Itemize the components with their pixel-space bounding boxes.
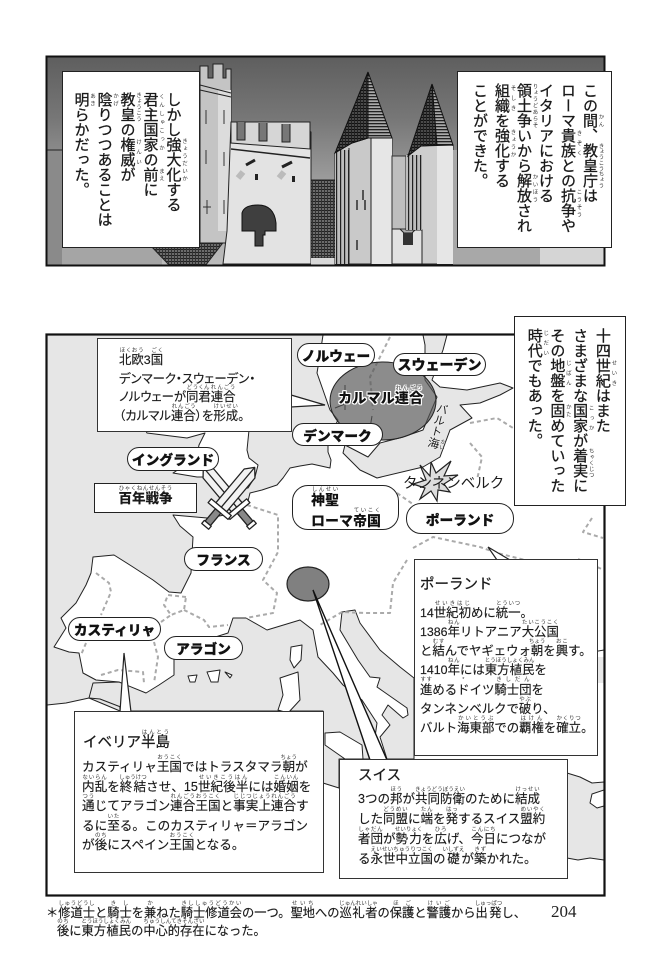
arrow: callout pointer to Switzerland (313, 590, 387, 760)
callout text: 北欧ほくおう 3国ごく (119, 348, 163, 367)
caption text: ことができた。 (471, 83, 488, 188)
Baltic Sea (343, 335, 513, 478)
callout body: と結むす んでヤギェウォ朝ちょう を興おこ す。 (420, 639, 592, 658)
caption text: イタリアにおける (537, 83, 554, 203)
tower: left square tower (200, 64, 231, 243)
caption text (72, 92, 188, 227)
callout heading: イベリア半島はんとう (83, 730, 170, 751)
Adriatic and Ionian Sea (340, 610, 414, 759)
footnote: ＊修道士しゅうどうし と騎士きし を兼か ねた騎士修道会きししゅうどうかい の一つ。聖地せいち への巡礼者じゅんれいしゃ の保護ほご と警護けいご から出発しゅっぱつ し、 (46, 901, 526, 920)
callout body: 進すす めるド* イツ騎士団きしだん を (420, 677, 544, 697)
label: Holy Roman Empire (292, 485, 399, 530)
caption: castle right (457, 71, 612, 248)
caption text: 君主国家くんしゅこっか の 前まえ に (142, 92, 164, 197)
callout text: ノルウェーが同君連合どうくんれんごう (119, 385, 236, 404)
map and castle artwork (45, 56, 606, 897)
label: Sweden: スウェーデン (398, 356, 482, 372)
caption text (526, 328, 617, 493)
callout heading: スイス (358, 768, 401, 784)
callout body: バルト海東部かいとうぶ での覇権はけん を確立かくりつ 。 (420, 716, 593, 735)
caption text: さまざまな 国家こっか が 着実ちゃくじつ に (571, 328, 594, 493)
label: England: イングランド (132, 453, 214, 468)
label: Norway (297, 343, 375, 367)
footnote (46, 900, 526, 938)
callout text (119, 347, 255, 423)
label: France (184, 547, 263, 571)
label: Hundred Years War: 百年戦争ひゃくねんせんそう (118, 486, 172, 506)
callout body: 者団しゃだん が勢力せいりょく を広ひろ げ、今日こんにち につなが (358, 827, 546, 846)
caption: fourteenth century (514, 316, 626, 506)
label: Tannenberg: タンネンベルク (403, 476, 504, 492)
label text (311, 486, 381, 528)
callout heading: ポーランド (420, 577, 492, 593)
label text: 神聖しんせい (311, 487, 339, 508)
callout: Poland (414, 559, 598, 756)
caption text: 領土争りょうどあらそ いから 解放かいほう され (515, 83, 538, 233)
ellipse: Kalmar Union territory (330, 362, 436, 440)
icon: crossed swords (193, 459, 265, 535)
label: Baltic Sea: バルト海かい (426, 402, 448, 451)
callout body: 通つう じてアラゴン連合王国れんごうおうこく と事実上連合じじつじょうれんごう す (82, 794, 309, 813)
panel: map of Europe (46, 335, 604, 895)
callout body: タンネンベルクで破やぶ り、 (420, 697, 556, 716)
callout text: （カルマル連合れんごう ）を形成けいせい 。 (119, 404, 244, 423)
label: Poland (406, 503, 514, 534)
label: Poland: ポーランド (426, 512, 494, 528)
tower: small pointed tower (406, 145, 453, 264)
caption text: その 地盤じばん を 固かた めていった (548, 328, 571, 493)
callout text: デンマーク・スウェーデン・ (119, 372, 255, 386)
ellipse: Switzerland (287, 567, 329, 601)
callout body: 14世紀初せいきはじ めに統一とういつ 。 (420, 601, 533, 620)
Atlantic and North Sea (46, 335, 338, 711)
callout: Iberian Peninsula (74, 711, 324, 873)
wall block (223, 122, 311, 264)
caption text: 教皇きょうこう の 権威けんい が (118, 92, 141, 182)
callout: Nordic union (97, 338, 292, 432)
callout body: カスティリャ王国おうこく ではトラスタマラ朝ちょう が (82, 755, 308, 774)
callout body: が後のち にスペイン王国おうこく となる。 (82, 833, 244, 852)
label: Castile: カスティリャ (74, 623, 155, 638)
border lines (81, 337, 604, 683)
label: Sweden (393, 353, 486, 376)
panel: castle illustration (46, 56, 604, 266)
caption text: 十四 世紀せいき はまた (594, 328, 616, 433)
label: France: フランス (196, 553, 251, 568)
caption text: この 間かん 、 教皇庁きょうこうちょう は (581, 83, 604, 203)
page number: 204 (551, 902, 576, 921)
callout body: る永世中立国えいせいちゅうりつこく の礎いしずえ が築きず かれた。 (358, 847, 536, 866)
callout body: 1410年ねん には東方植民とうほうしょくみん を (420, 658, 547, 677)
callout body (82, 754, 311, 852)
caption text: 陰かげ りつつあることは (96, 92, 118, 227)
icon: Tannenberg battle starburst (413, 461, 458, 501)
callout body: した同盟どうめい に端たん を発はっ するスイス盟約めいやく (358, 807, 545, 826)
label: Denmark (292, 423, 383, 446)
caption text: ローマ 貴族きぞく との 抗争こうそう や (559, 83, 582, 233)
callout: Switzerland (339, 759, 568, 879)
label: Castile (68, 617, 161, 641)
caption text: 時代じだい でもあった。 (526, 328, 548, 448)
Britain and Ireland (146, 432, 258, 489)
Mediterranean islands (188, 645, 363, 759)
label: Aragon (164, 636, 243, 660)
footnote: 後のち に東方植民とうほうしょくみん の中心的存在ちゅうしんてきそんざい になった。 (57, 919, 266, 938)
tower: large pointed tower (335, 138, 392, 264)
caption text (471, 83, 604, 233)
Mediterranean (89, 618, 385, 788)
caption text: 明あき らかだった。 (72, 92, 95, 197)
label: Kalmar Union: カルマル連合れんごう (338, 386, 423, 407)
label text: ローマ帝国ていこく (311, 508, 381, 528)
caption text: しかし 強大化きょうだいか する (164, 92, 187, 212)
caption: castle left (62, 71, 200, 248)
label: Norway: ノルウェー (302, 349, 370, 364)
label: Hundred Years War (94, 483, 197, 513)
callout body (358, 786, 546, 866)
callout body: 内乱ないらん を終結しゅうけつ させ、15世紀後半せいきこうはん には婚姻こんいん を (82, 774, 311, 794)
callout body: 3つの邦ほう が共同防衛きょうどうぼうえい のために結成けっせい (358, 787, 540, 806)
arrow: callout pointer to Poland (488, 547, 510, 560)
callout body (420, 600, 593, 735)
label: Aragon: アラゴン (176, 642, 231, 657)
caption text: 組織そしき を 強化きょうか する (493, 83, 516, 188)
arrow: Kalmar callout pointer (292, 394, 326, 408)
callout body: 1386年ねん リトアニア大公国たいこうこく (420, 620, 559, 639)
arrow: callout pointer to Castile (120, 653, 131, 712)
callout body: るに至いた る。このカスティリャ＝アラゴン (82, 814, 308, 832)
Black Sea (567, 773, 604, 860)
label: Denmark: デンマーク (303, 428, 372, 444)
label: England (127, 447, 219, 471)
